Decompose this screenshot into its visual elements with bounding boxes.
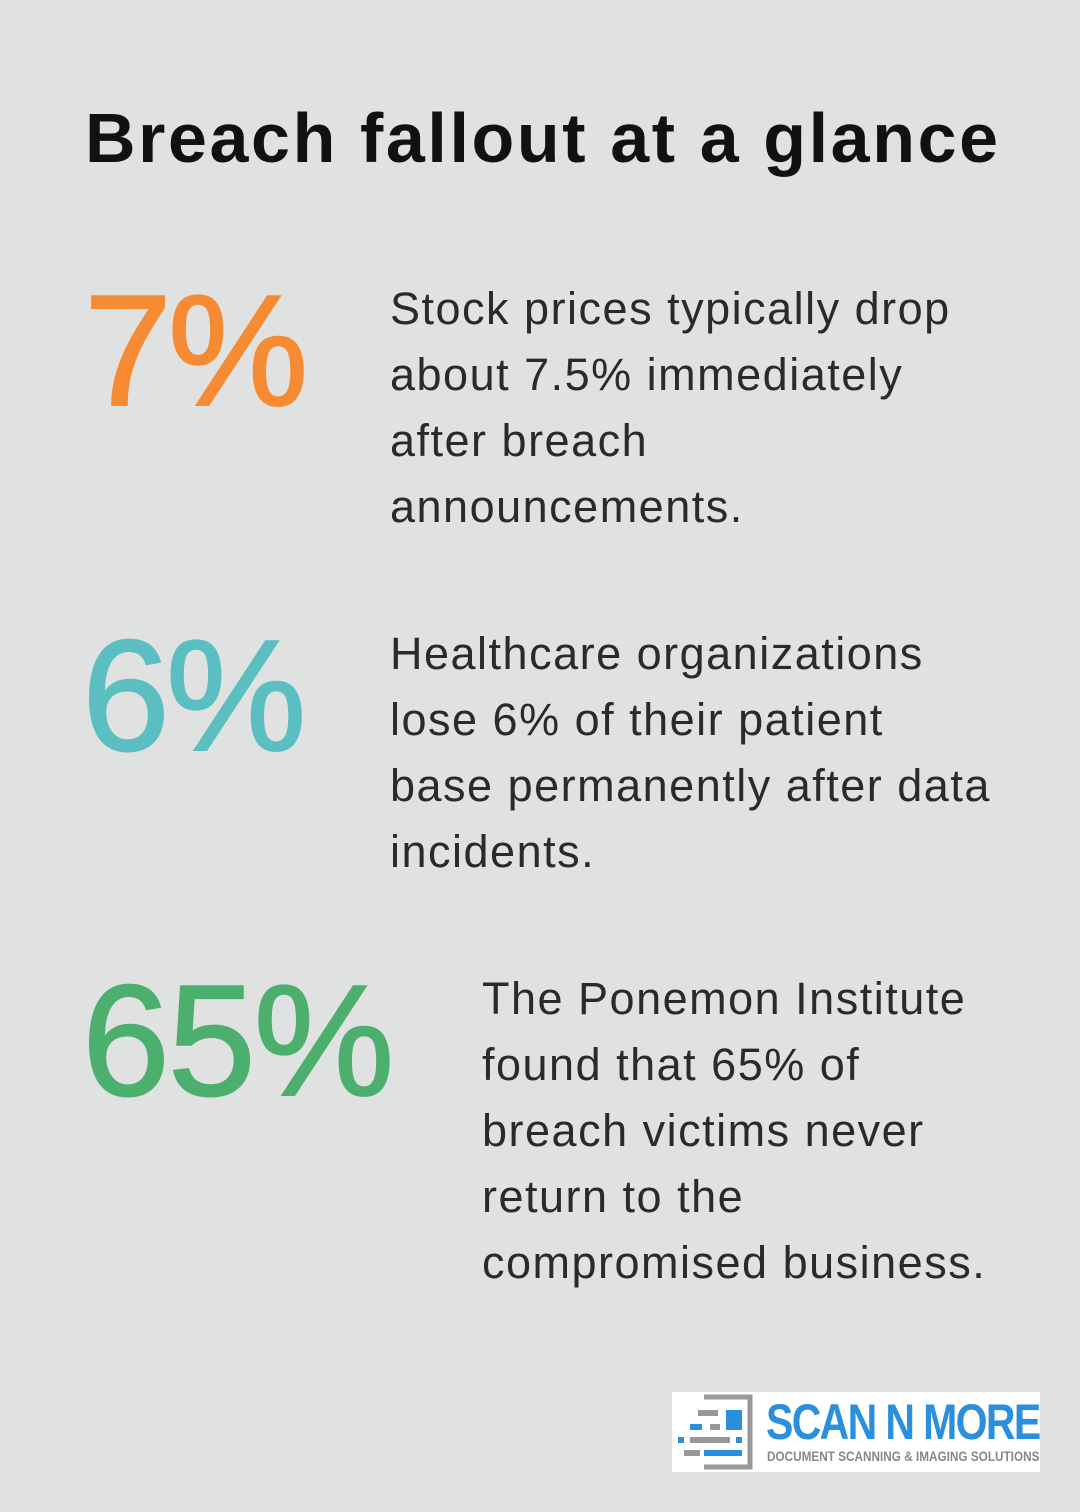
- text 1: Stock prices typically drop: [390, 283, 951, 334]
- text 2: base permanently after data: [390, 760, 991, 811]
- text 3: found that 65% of: [482, 1039, 860, 1090]
- logo icon: [678, 1394, 752, 1470]
- text 3: compromised business.: [482, 1237, 986, 1288]
- logo text: SCAN N MORE: [766, 1394, 1040, 1450]
- text 1: announcements.: [390, 481, 744, 532]
- text 2: lose 6% of their patient: [390, 694, 884, 745]
- stat 1: [84, 263, 951, 532]
- stat 2: [82, 608, 991, 877]
- text 3: The Ponemon Institute: [482, 973, 966, 1024]
- text 2: incidents.: [390, 826, 595, 877]
- text 1: after breach: [390, 415, 648, 466]
- text 2: Healthcare organizations: [390, 628, 924, 679]
- text 1: about 7.5% immediately: [390, 349, 903, 400]
- logo: [672, 1392, 1040, 1472]
- text 1: [390, 283, 951, 532]
- number 7%: 7%: [84, 263, 304, 439]
- number 6%: 6%: [82, 608, 302, 784]
- number 65%: 65%: [82, 953, 392, 1129]
- text 2: [390, 628, 991, 877]
- title: Breach fallout at a glance: [85, 99, 1001, 177]
- logo: DOCUMENT SCANNING & IMAGING SOLUTIONS: [767, 1448, 1039, 1464]
- stat 3: [82, 953, 986, 1288]
- text 3: breach victims never: [482, 1105, 925, 1156]
- text 3: [482, 973, 986, 1288]
- text 3: return to the: [482, 1171, 744, 1222]
